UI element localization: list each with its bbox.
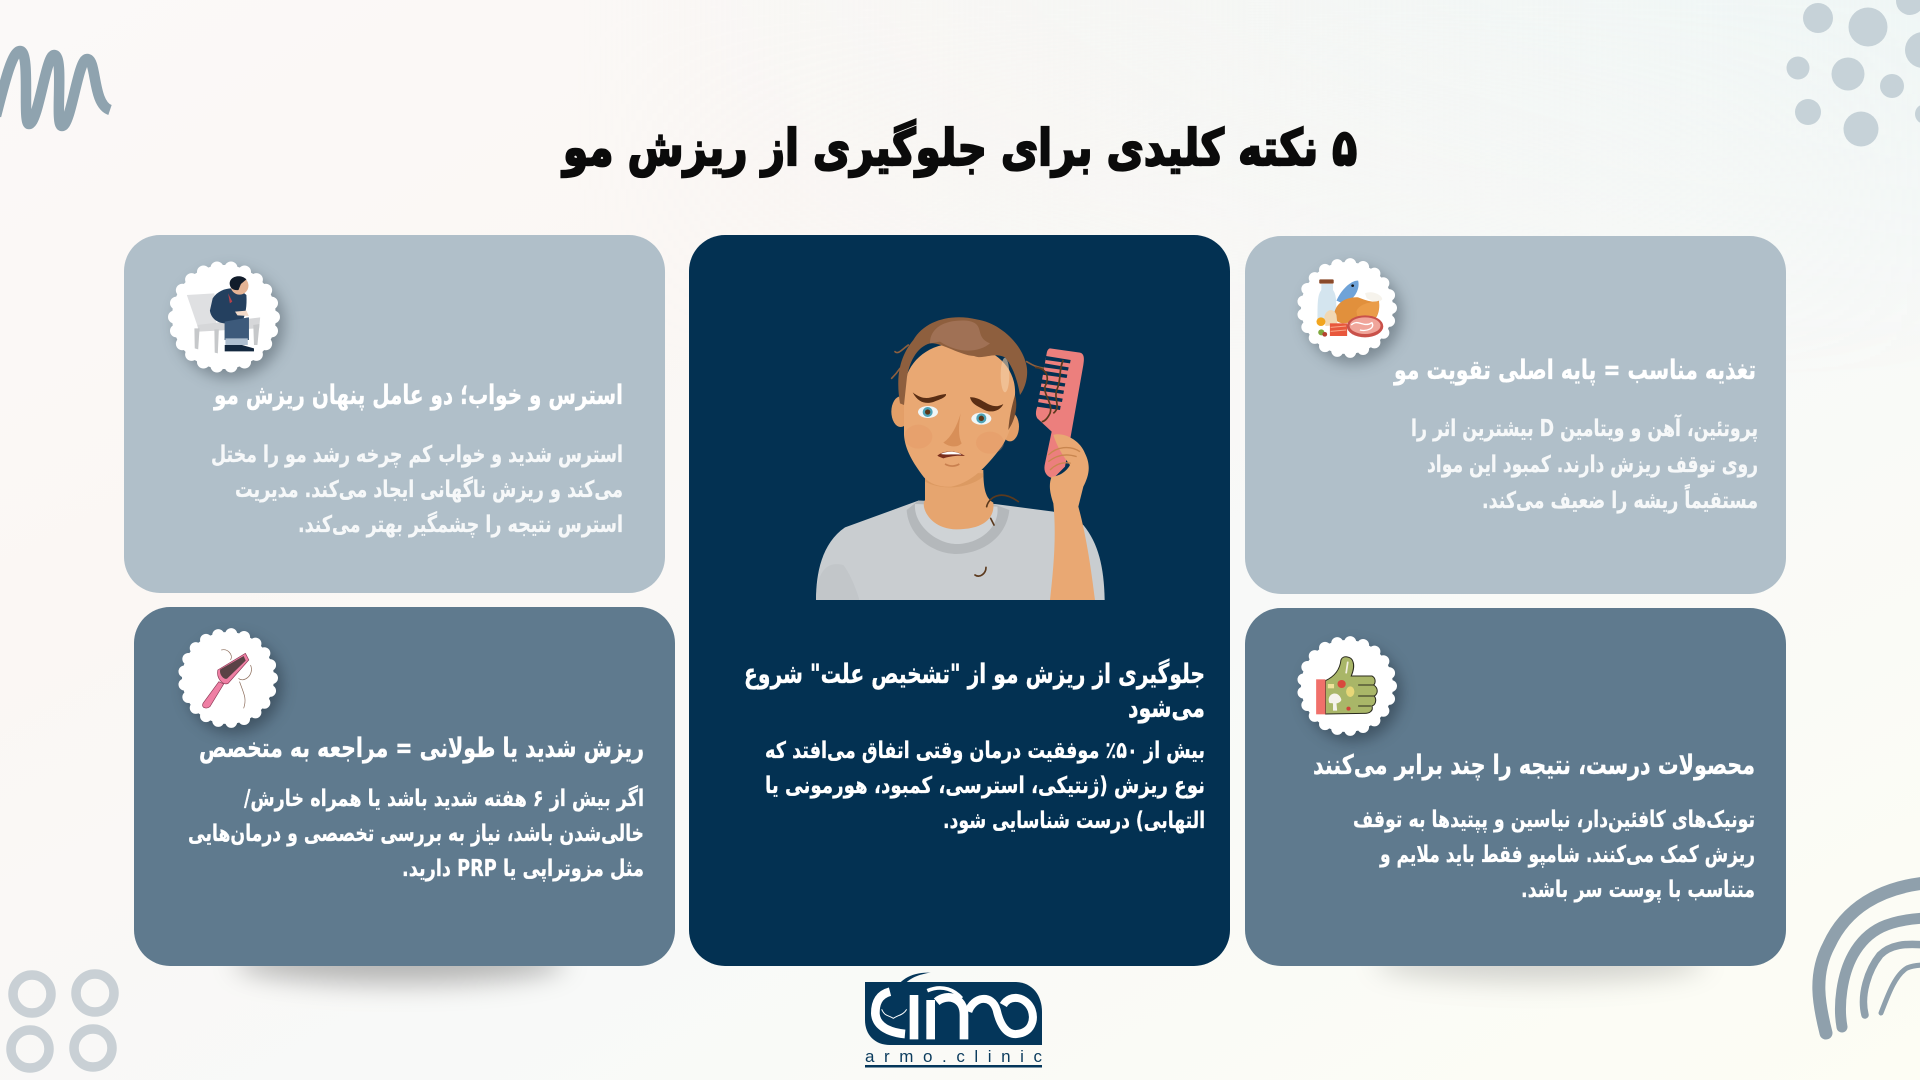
text block	[188, 785, 644, 882]
text block: می‌کند و ریزش ناگهانی ایجاد می‌کند. مدیریت	[235, 476, 623, 503]
panel: products	[1245, 608, 1786, 966]
icon: stressed man	[172, 265, 276, 369]
text block: ریزش کمک می‌کنند. شامپو فقط باید ملایم و	[1379, 842, 1755, 868]
text block: مستقیماً ریشه را ضعیف می‌کند.	[1482, 484, 1758, 514]
text block: نوع ریزش (ژنتیکی، استرسی، کمبود، هورمونی یا	[765, 773, 1205, 799]
heading: ریزش شدید یا طولانی = مراجعه به متخصص	[199, 733, 644, 764]
card background	[124, 235, 665, 593]
panel: specialist referral	[134, 607, 675, 966]
text block: اگر بیش از ۶ هفته شدید باشد یا همراه خارش/	[244, 785, 644, 812]
comb	[1036, 348, 1084, 478]
card background	[689, 235, 1230, 966]
text block	[211, 442, 623, 538]
decoration: rings bottom left	[11, 974, 114, 1068]
panel: nutrition	[1245, 236, 1786, 594]
heading: می‌شود	[1128, 693, 1205, 724]
hair	[898, 317, 1027, 405]
eyebrows	[913, 392, 946, 403]
text block: استرس نتیجه را چشمگیر بهتر می‌کند.	[298, 511, 623, 538]
text block: متناسب با پوست سر باشد.	[1521, 877, 1755, 903]
text block: استرس شدید و خواب کم چرخه رشد مو را مختل	[211, 442, 623, 468]
heading: استرس و خواب؛ دو عامل پنهان ریزش مو	[213, 380, 623, 411]
card shadows	[235, 940, 1705, 984]
icon: thumbs up	[1301, 640, 1393, 732]
heading: جلوگیری از ریزش مو از "تشخیص علت" شروع	[744, 658, 1205, 690]
panel: diagnosis (center)	[689, 235, 1230, 966]
heading: محصولات درست، نتیجه را چند برابر می‌کنند	[1313, 750, 1755, 781]
card background	[134, 607, 675, 966]
decoration: squiggle top left	[0, 51, 110, 126]
nose	[943, 413, 962, 446]
icon: hairbrush	[182, 632, 274, 724]
follicle	[886, 973, 931, 1018]
decoration: arcs bottom right	[1819, 883, 1920, 1033]
face	[904, 343, 1015, 487]
background	[1554, 0, 1920, 108]
collar	[907, 501, 1009, 554]
card background	[1245, 236, 1786, 594]
text block: تونیک‌های کافئین‌دار، نیاسین و پپتیدها به توقف	[1353, 807, 1755, 833]
neck	[924, 467, 993, 529]
logo text: armo.clinic	[865, 1047, 1042, 1066]
loose hairs	[975, 495, 1018, 576]
text block: بیش از ۵۰٪ موفقیت درمان وقتی اتفاق می‌افتد که	[765, 738, 1205, 764]
text block: مثل مزوتراپی یا PRP دارید.	[402, 856, 644, 882]
panel: stress and sleep	[124, 235, 665, 593]
illustration: man with comb	[816, 317, 1105, 600]
card background	[1245, 608, 1786, 966]
heading	[744, 658, 1205, 724]
ears	[891, 396, 910, 427]
logo letters	[875, 973, 1033, 1039]
hand and arm	[1050, 434, 1095, 600]
text block: پروتئین، آهن و ویتامین D بیشترین اثر را	[1411, 413, 1758, 442]
eyes	[918, 406, 938, 418]
text block	[1353, 807, 1755, 903]
shirt	[816, 501, 1105, 600]
text block: التهابی) درست شناسایی شود.	[943, 808, 1205, 834]
heading: تغذیه مناسب = پایه اصلی تقویت مو	[1392, 355, 1756, 386]
text block	[1411, 413, 1758, 514]
title: ۵ نکته کلیدی برای جلوگیری از ریزش مو	[561, 119, 1357, 178]
decoration: dots top right	[1786, 0, 1920, 146]
text block: خالی‌شدن باشد، نیاز به بررسی تخصصی و درمان‌هایی	[188, 821, 644, 847]
icon: food	[1301, 262, 1393, 354]
text block: روی توقف ریزش دارند. کمبود این مواد	[1427, 452, 1758, 478]
text block	[765, 738, 1205, 834]
logo	[865, 973, 1042, 1068]
mouth	[937, 451, 965, 458]
